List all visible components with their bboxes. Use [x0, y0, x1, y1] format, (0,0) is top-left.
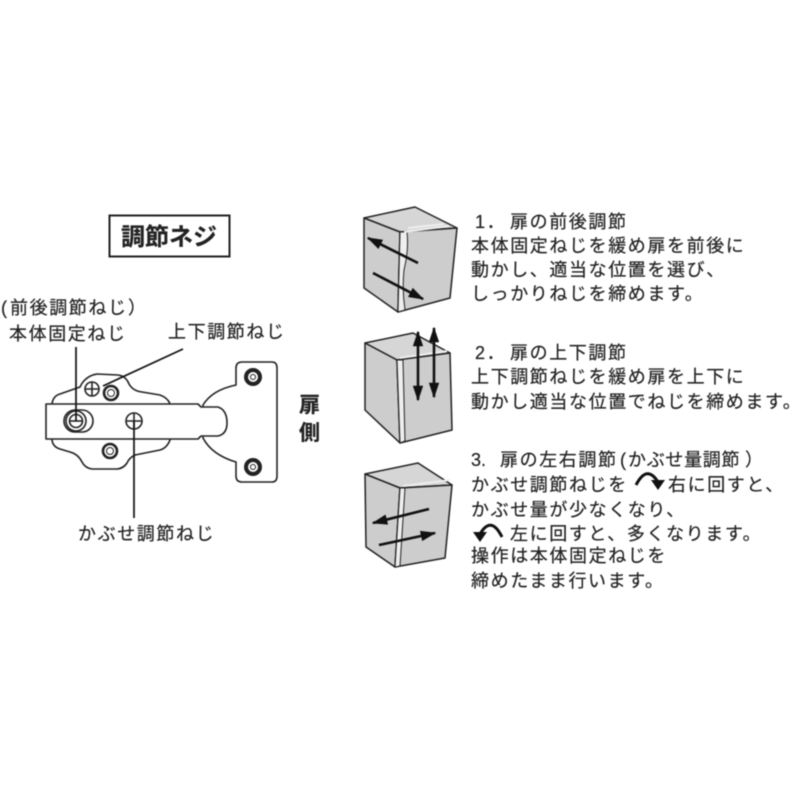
icon: clockwise turn arrow	[636, 474, 665, 490]
label: front-back adjustment screw: 本体固定ねじ	[9, 324, 127, 344]
text: step 1 front-back adjustment: 動かし、適当な位置を選び、	[471, 260, 726, 280]
hinge diagram	[46, 347, 277, 518]
body fixing screw in slot	[64, 410, 93, 432]
text: step 3 left-right adjustment: かぶせ調節ねじを	[471, 475, 628, 495]
text: step 2 up-down adjustment	[471, 343, 800, 412]
text: step 3 left-right adjustment: 締めたまま行います。	[471, 571, 665, 591]
text: step 3 left-right adjustment: 3.	[471, 450, 486, 470]
text: step 1 front-back adjustment	[471, 212, 745, 304]
text: step 2 up-down adjustment: 扉の上下調節	[510, 343, 628, 363]
fixing screw on upper plate	[85, 382, 99, 396]
text: step 3 left-right adjustment: かぶせ量調節	[628, 450, 740, 470]
label: door side	[299, 394, 320, 445]
text: step 3 left-right adjustment: 右に回すと、	[668, 475, 785, 495]
icon: counterclockwise turn arrow	[473, 525, 502, 542]
label: front-back adjustment screw: 前後調節ねじ	[10, 298, 128, 318]
text: step 3 left-right adjustment: ）	[745, 450, 763, 470]
text: step 3 left-right adjustment: かぶせ量が少なくなり、	[471, 500, 686, 520]
title: adjustment screws: 調節ネジ	[121, 224, 217, 251]
text: step 3 left-right adjustment: (	[620, 450, 626, 470]
leader lines	[76, 347, 183, 518]
label: door side: 側	[299, 422, 320, 445]
text: step 3 left-right adjustment: 扉の左右調節	[500, 450, 618, 470]
title: adjustment screws	[110, 216, 230, 256]
text: step 1 front-back adjustment: 本体固定ねじを緩め扉を前後に	[471, 236, 745, 256]
height adjustment screw	[104, 386, 118, 400]
label: height adjustment screw: 上下調節ねじ	[168, 322, 286, 342]
label: overlay adjustment screw: かぶせ調節ねじ	[78, 524, 215, 544]
text: step 1 front-back adjustment: 扉の前後調節	[510, 212, 628, 232]
label: front-back adjustment screw	[1, 298, 146, 344]
text: step 2 up-down adjustment: 2．	[475, 343, 506, 363]
fixing screw on lower plate	[103, 444, 117, 458]
overlay adjustment screw	[126, 413, 142, 429]
text: step 1 front-back adjustment: 1．	[475, 212, 506, 232]
text: step 3 left-right adjustment	[471, 450, 785, 591]
icon: cabinet with up-down arrows	[365, 328, 452, 443]
text: step 3 left-right adjustment: 左に回すと、多くなります。	[510, 524, 762, 544]
text: step 1 front-back adjustment: しっかりねじを締めます。	[471, 284, 704, 304]
mounting screw: top	[246, 370, 260, 384]
icon: cabinet with front-back arrows	[364, 207, 457, 312]
text: step 3 left-right adjustment: 操作は本体固定ねじを	[471, 546, 667, 566]
label: front-back adjustment screw: (	[1, 298, 7, 318]
text: step 2 up-down adjustment: 上下調節ねじを緩め扉を上下に	[471, 367, 745, 387]
label: front-back adjustment screw: ）	[128, 298, 146, 318]
hinge base plate	[52, 374, 170, 469]
hinge mounting plate	[203, 362, 277, 482]
icon: cabinet with left-right arrows	[365, 463, 452, 567]
label: door side: 扉	[299, 394, 320, 417]
text: step 2 up-down adjustment: 動かし適当な位置でねじを締めます。	[471, 392, 800, 412]
mounting screw: bottom	[246, 460, 260, 474]
hinge arm	[46, 404, 227, 439]
